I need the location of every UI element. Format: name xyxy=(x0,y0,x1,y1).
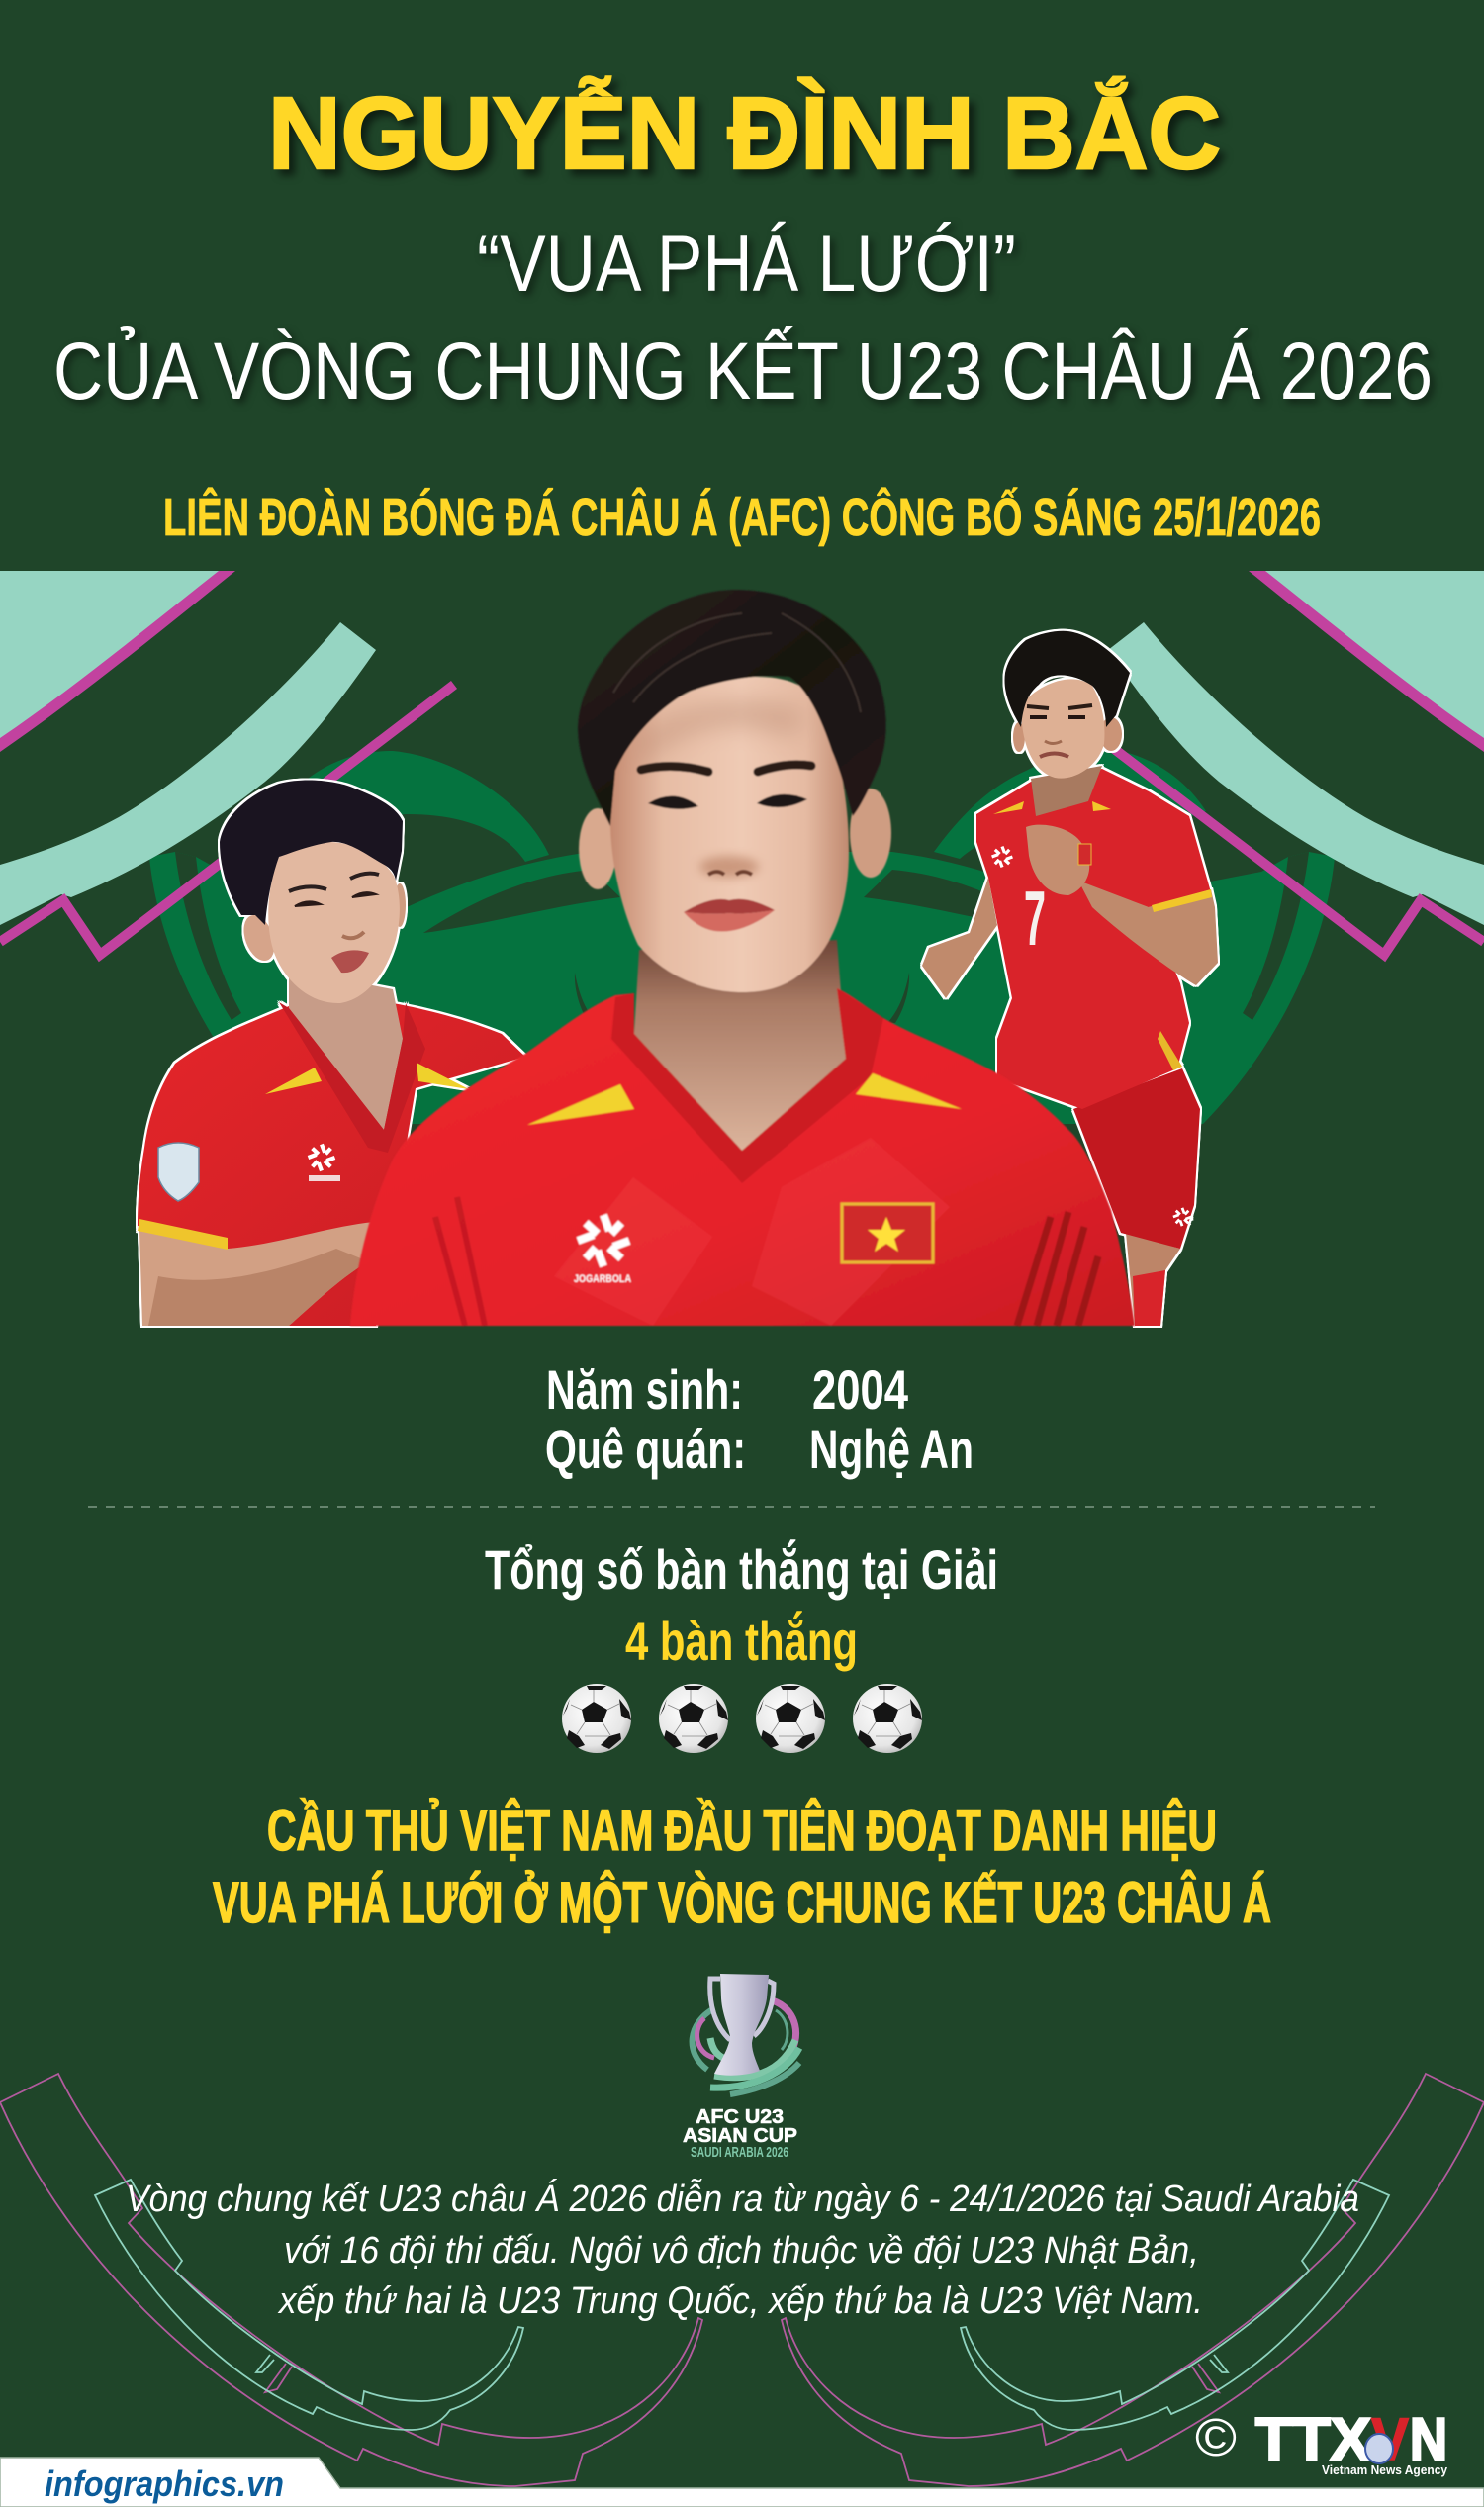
title: player name: NGUYỄN ĐÌNH BẮC xyxy=(268,75,1221,190)
photo: player running, right xyxy=(922,631,1218,1326)
trophy text line 2: ASIAN CUP xyxy=(683,2125,797,2147)
trophy text line 1: AFC U23 xyxy=(696,2106,784,2128)
jersey collar yellow left xyxy=(527,1084,634,1125)
jersey collar xyxy=(611,988,883,1183)
neck xyxy=(634,940,846,1151)
trophy rings xyxy=(693,2000,799,2094)
jersey flag xyxy=(842,1204,933,1262)
footer white band xyxy=(0,2458,1484,2507)
copyright symbol: © xyxy=(1195,2408,1237,2467)
logo: TTXVN: Vietnam News Agency xyxy=(1322,2462,1448,2477)
description text block: xếp thứ hai là U23 Trung Quốc, xếp thứ ba là U23 Việt Nam. xyxy=(277,2280,1203,2322)
logo: TTXVN: N xyxy=(1410,2406,1447,2472)
mint and magenta decoration left xyxy=(0,571,454,955)
eyes xyxy=(648,794,807,809)
total goals value: 4 bàn thắng xyxy=(625,1610,858,1672)
ear left xyxy=(579,808,616,889)
face xyxy=(610,677,849,992)
birth year label: Năm sinh: xyxy=(546,1358,743,1421)
trophy cup xyxy=(714,1974,769,2076)
nostrils xyxy=(708,872,752,875)
logo: TTXVN: TTX xyxy=(1255,2406,1371,2472)
description text block xyxy=(126,2177,1359,2322)
logo: TTXVN: V xyxy=(1371,2406,1409,2472)
hair xyxy=(578,590,886,826)
mint and magenta decoration right xyxy=(1030,571,1484,955)
background outline arcs right xyxy=(782,2074,1484,2486)
nose shading xyxy=(699,856,759,878)
logo: TTXVN xyxy=(1255,2406,1448,2477)
ear right xyxy=(850,789,891,878)
hair highlights xyxy=(613,613,861,712)
hometown value: Nghệ An xyxy=(809,1418,974,1480)
icons: four footballs xyxy=(562,1684,922,1753)
background outline arcs left xyxy=(0,2074,702,2486)
jersey brand logo xyxy=(578,1215,629,1266)
jersey brand wordmark: JOGARBOLA xyxy=(574,1273,631,1285)
hair shadow on forehead xyxy=(633,700,806,762)
photo: player running, right: 7 xyxy=(1024,875,1046,962)
photo: main player portrait, center xyxy=(350,590,1135,1326)
description text block: với 16 đội thi đấu. Ngôi vô địch thuộc về đội U23 Nhật Bản, xyxy=(284,2230,1199,2272)
lower lip xyxy=(684,910,775,932)
jersey collar yellow right xyxy=(856,1073,962,1109)
trophy handles xyxy=(710,1979,774,2040)
jersey xyxy=(350,988,1135,1326)
green AFC leaf emblem backdrop xyxy=(149,751,1335,1124)
jersey pattern xyxy=(554,1138,950,1326)
photo: player celebrating, left xyxy=(138,781,525,1326)
heading: top scorer: “VUA PHÁ LƯỚI” xyxy=(477,220,1016,309)
birth year value: 2004 xyxy=(812,1358,908,1421)
description text block: Vòng chung kết U23 châu Á 2026 diễn ra từ ngày 6 - 24/1/2026 tại Saudi Arabia xyxy=(126,2177,1359,2220)
eyebrows xyxy=(641,765,811,772)
total goals label: Tổng số bàn thắng tại Giải xyxy=(485,1538,998,1601)
logo: AFC U23 Asian Cup xyxy=(683,1974,799,2161)
trophy text line 3: SAUDI ARABIA 2026 xyxy=(691,2144,788,2161)
highlight statement xyxy=(213,1799,1271,1935)
footer website: infographics.vn xyxy=(45,2463,284,2504)
upper lip xyxy=(684,899,775,914)
jersey shading stripes xyxy=(1017,1212,1098,1326)
hometown label: Quê quán: xyxy=(545,1418,746,1480)
